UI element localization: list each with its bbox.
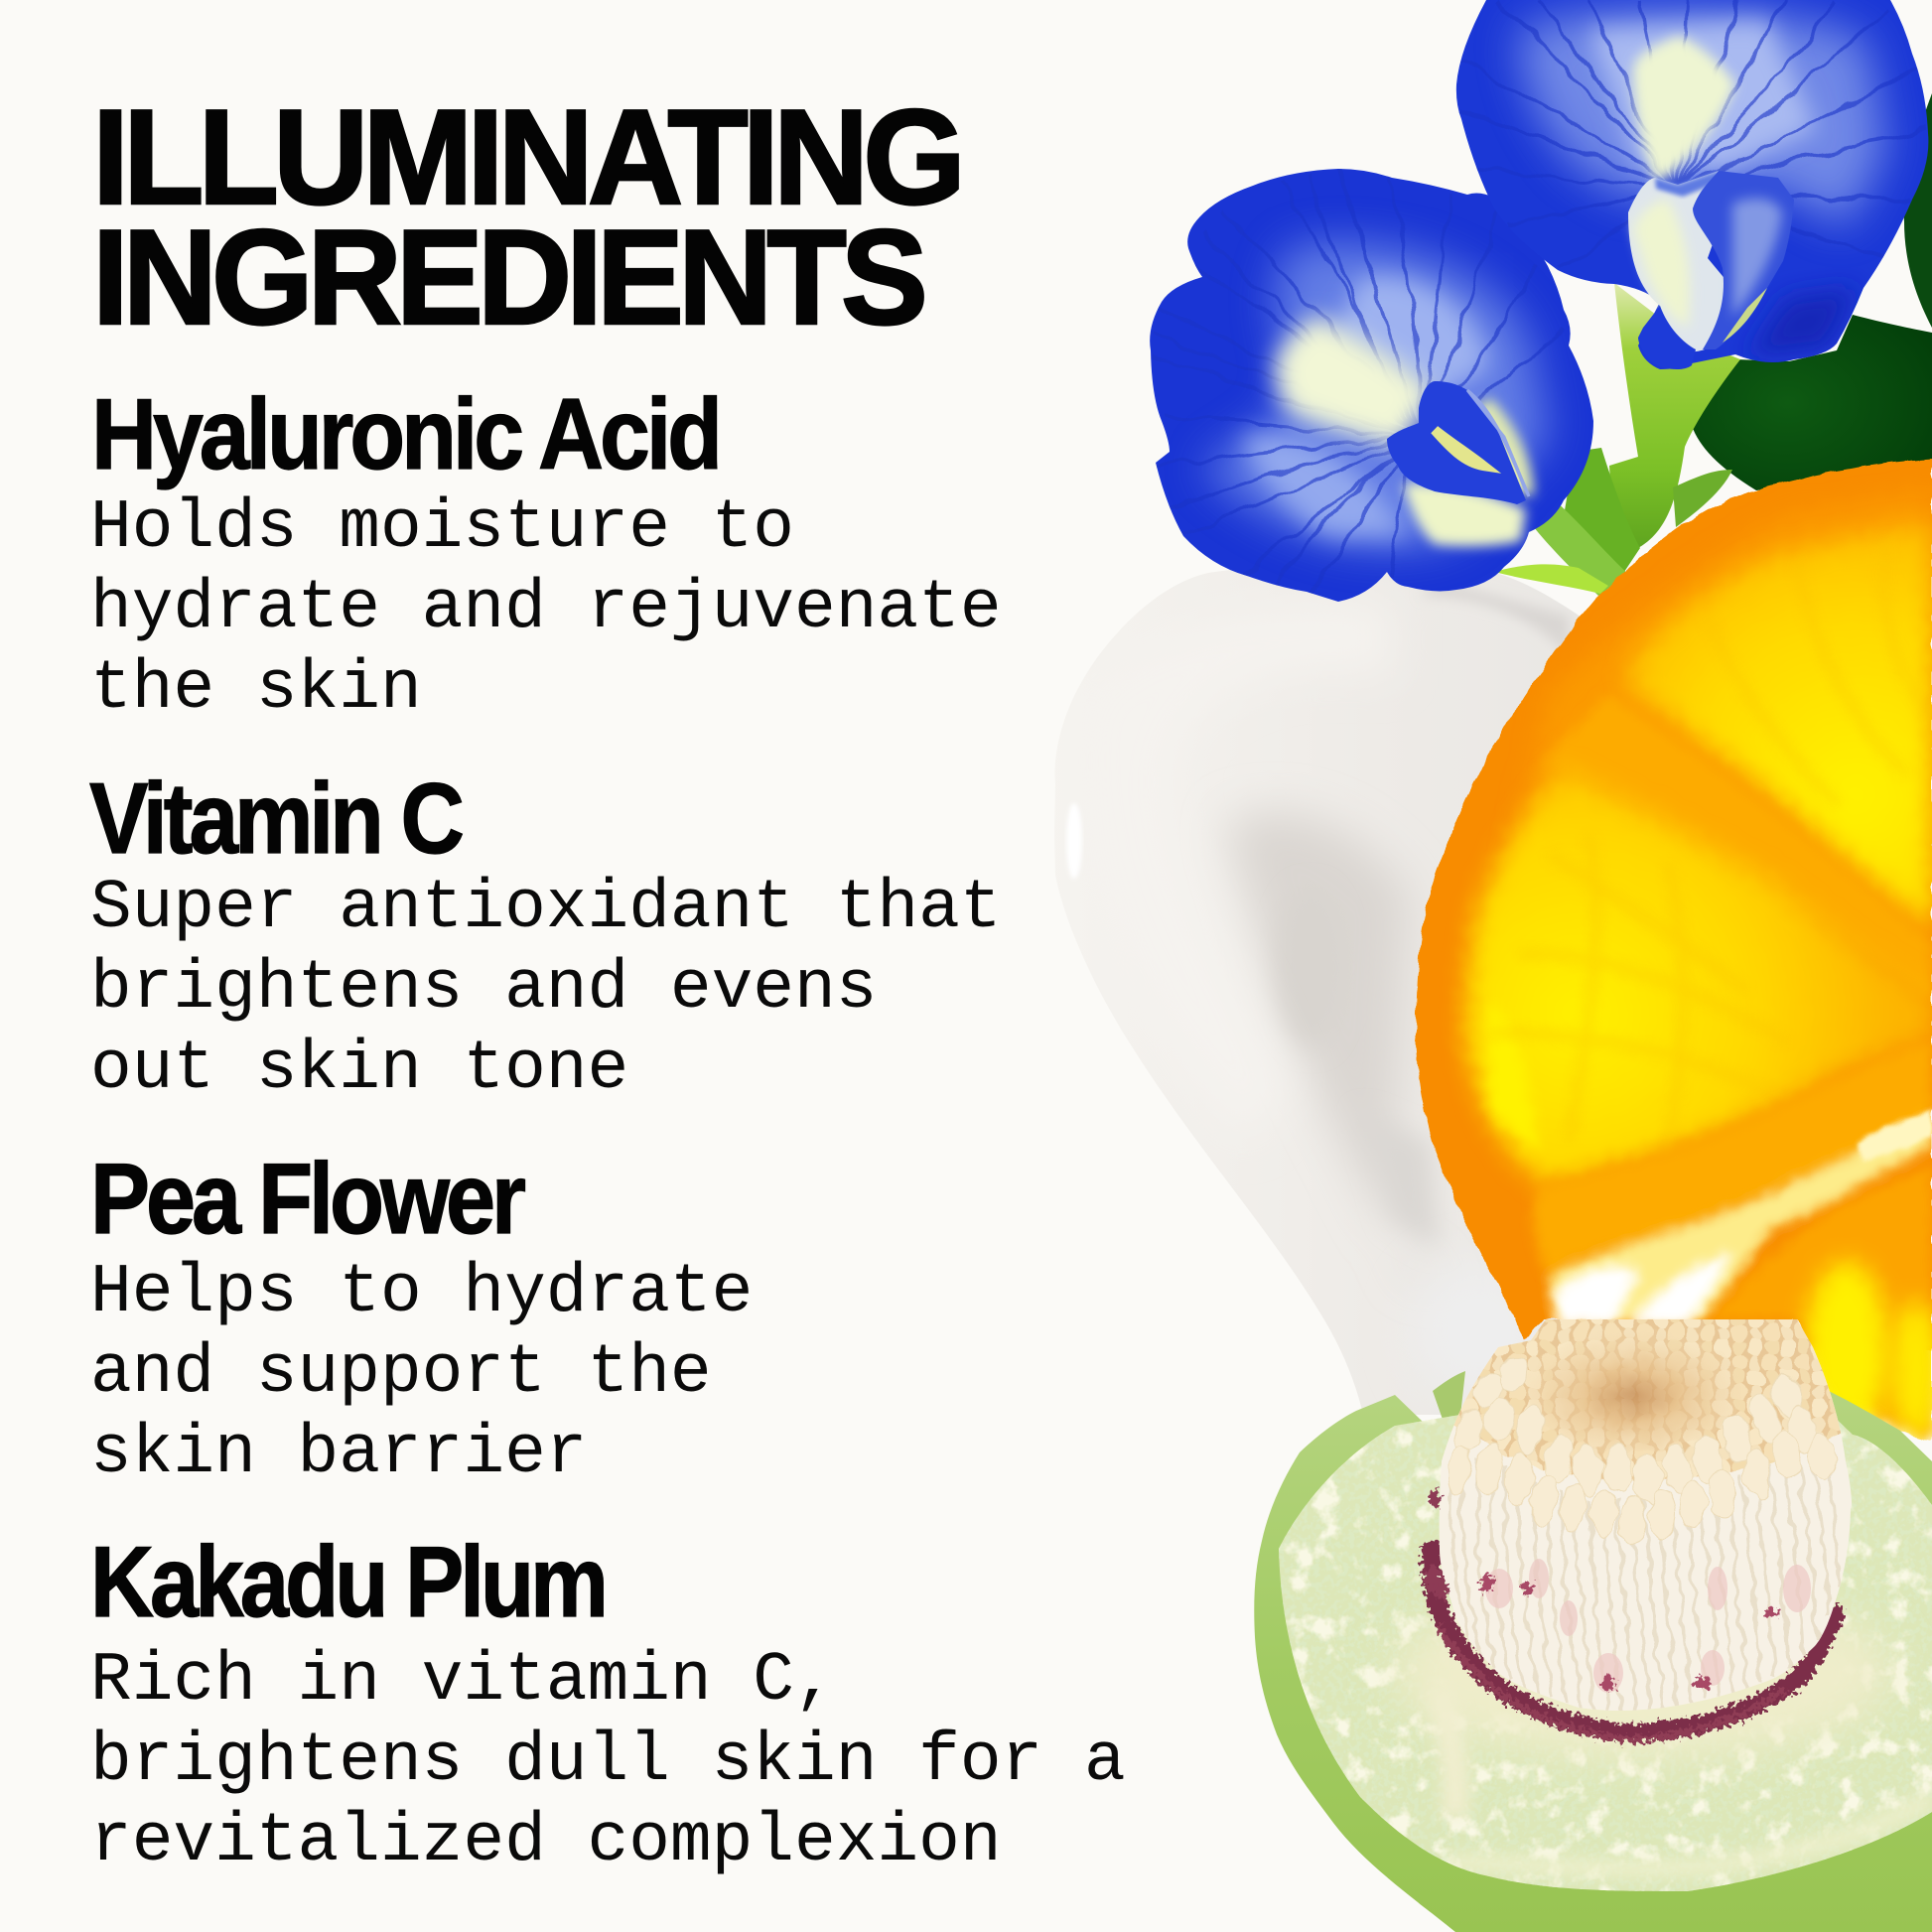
- ingredient description: and support the: [90, 1333, 712, 1412]
- ingredient name: Vitamin C: [89, 763, 463, 875]
- ingredient description: brightens dull skin for a: [90, 1722, 1126, 1800]
- middle orange band: [1539, 695, 1932, 1003]
- plum rim: [1433, 1371, 1465, 1431]
- ingredient description: skin barrier: [90, 1414, 587, 1492]
- lower segment: [1466, 768, 1932, 1181]
- panel: pea flower: [90, 1144, 753, 1492]
- lower orange band: [1534, 1039, 1932, 1275]
- panel: kakadu plum: [90, 1527, 1126, 1880]
- flower veins: [1152, 169, 1564, 596]
- icon: orange slice: [1400, 447, 1932, 1441]
- heading: INGREDIENTS: [92, 202, 923, 352]
- crown droplets: [1445, 1355, 1837, 1543]
- upper segment: [1628, 523, 1932, 927]
- ingredient description: revitalized complexion: [90, 1802, 1002, 1880]
- ingredient name: Kakadu Plum: [90, 1527, 605, 1638]
- ingredient description: Helps to hydrate: [90, 1253, 753, 1331]
- panel: vitamin c: [89, 763, 1002, 1108]
- white glow patch: [1549, 1113, 1932, 1320]
- ingredient description: Holds moisture to: [90, 488, 794, 567]
- flower keel: [1387, 381, 1529, 504]
- cream swatch illustration: [1066, 570, 1580, 1415]
- icon: upper-right pea flower: [1449, 0, 1932, 377]
- pink petal flecks: [1485, 1559, 1811, 1693]
- icon: plum seed centre: [1425, 1311, 1866, 1739]
- flower veins: [1459, 0, 1926, 268]
- ingredient description: Rich in vitamin C,: [90, 1641, 836, 1720]
- crown: [1449, 1311, 1847, 1479]
- seed crumbs: [1432, 1549, 1835, 1739]
- icon: dark green leaves: [1692, 93, 1932, 490]
- ingredient description: the skin: [90, 649, 422, 728]
- ingredient description: out skin tone: [90, 1030, 628, 1108]
- icon: flower stems and sepals: [1494, 283, 1740, 596]
- heading: ILLUMINATING: [92, 81, 960, 232]
- plum flesh: [1279, 1415, 1932, 1891]
- segment membranes: [1494, 707, 1901, 1090]
- icon: kakadu plum slice: [1254, 1371, 1932, 1932]
- heading: [92, 81, 960, 352]
- icon: lower-left pea flower: [1142, 159, 1608, 616]
- flower keel: [1628, 171, 1794, 369]
- ingredient description: brightens and evens: [90, 949, 877, 1028]
- seed strands: [1450, 1445, 1839, 1712]
- ingredient name: Pea Flower: [90, 1144, 525, 1255]
- ingredient description: Super antioxidant that: [90, 869, 1002, 947]
- panel: hyaluronic acid: [90, 379, 1002, 728]
- ingredient description: hydrate and rejuvenate: [90, 569, 1002, 647]
- lower wedge: [1708, 1165, 1932, 1441]
- orange rim shading: [1533, 498, 1928, 927]
- ingredient name: Hyaluronic Acid: [91, 379, 719, 490]
